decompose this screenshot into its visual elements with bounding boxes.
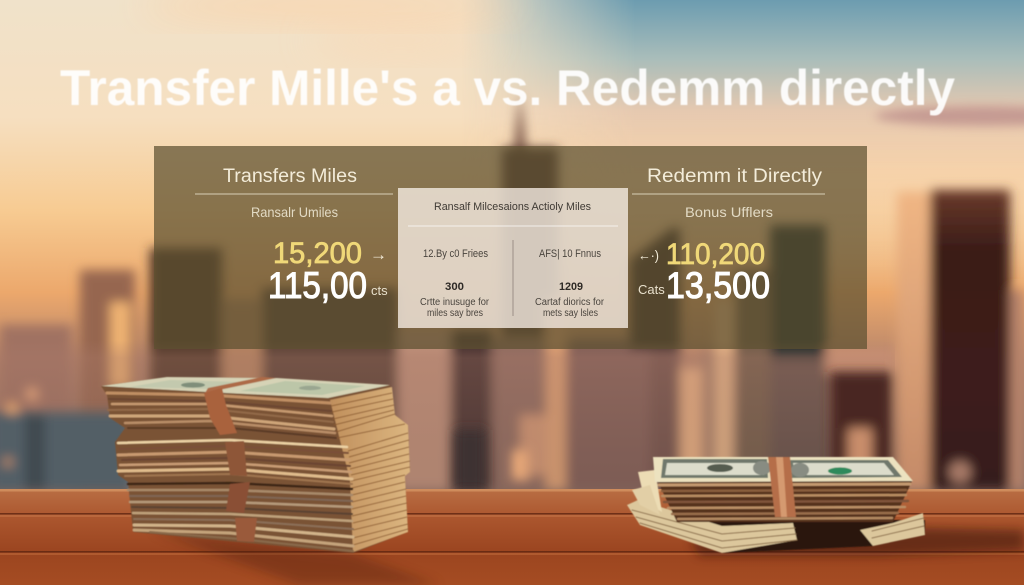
- right subheading: Bonus Ufflers: [685, 204, 773, 220]
- card right column: AFS| 10 Fnnus: [539, 248, 601, 260]
- right unit: Cats: [638, 282, 665, 297]
- stack top banknote: [101, 377, 390, 398]
- left column: transfer miles: [195, 166, 393, 306]
- right heading: Redemm it Directly: [647, 166, 823, 187]
- card left column: Crtte inusuge for: [420, 297, 490, 308]
- title: Transfer Mille's a vs. Redemm directly: [60, 60, 955, 116]
- card left column: 12.By c0 Friees: [423, 248, 488, 260]
- upper bill layers: [658, 481, 912, 522]
- left white value: 115,00: [268, 265, 367, 306]
- right yellow value: 110,200: [666, 238, 765, 271]
- card right column: [535, 248, 605, 319]
- center comparison card: [398, 188, 628, 328]
- right arrow: ←·): [638, 247, 659, 263]
- card right column: Cartaf diorics for: [535, 297, 605, 308]
- left heading: Transfers Miles: [223, 166, 357, 187]
- right white value: 13,500: [666, 265, 770, 306]
- card right column: 1209: [559, 281, 583, 293]
- card left column: 300: [445, 281, 464, 293]
- translucent comparison panel: [154, 146, 867, 349]
- lower fanned bills: [627, 470, 925, 553]
- top banknote: [653, 457, 913, 482]
- paper strap: [768, 457, 796, 517]
- left subheading: Ransalr Umiles: [251, 204, 338, 220]
- card left column: [420, 248, 490, 319]
- left money stack: [101, 377, 410, 553]
- left yellow value: 15,200: [273, 237, 362, 270]
- left arrow: →: [370, 245, 387, 264]
- left unit: cts: [371, 283, 388, 298]
- right column: redeem directly: [632, 166, 825, 306]
- stack paper straps: [205, 377, 276, 393]
- stack page edges: front side: [107, 393, 353, 551]
- card left column: miles say bres: [427, 308, 483, 319]
- card heading: Ransalf Milcesaions Actioly Miles: [434, 201, 591, 213]
- wooden table: [0, 489, 1024, 585]
- right money stack: [627, 457, 925, 553]
- card right column: mets say lsles: [543, 308, 598, 319]
- stack silhouette: [101, 377, 410, 553]
- background: blurred city skyline: [0, 92, 1024, 492]
- stack page edges: right side: [330, 387, 410, 552]
